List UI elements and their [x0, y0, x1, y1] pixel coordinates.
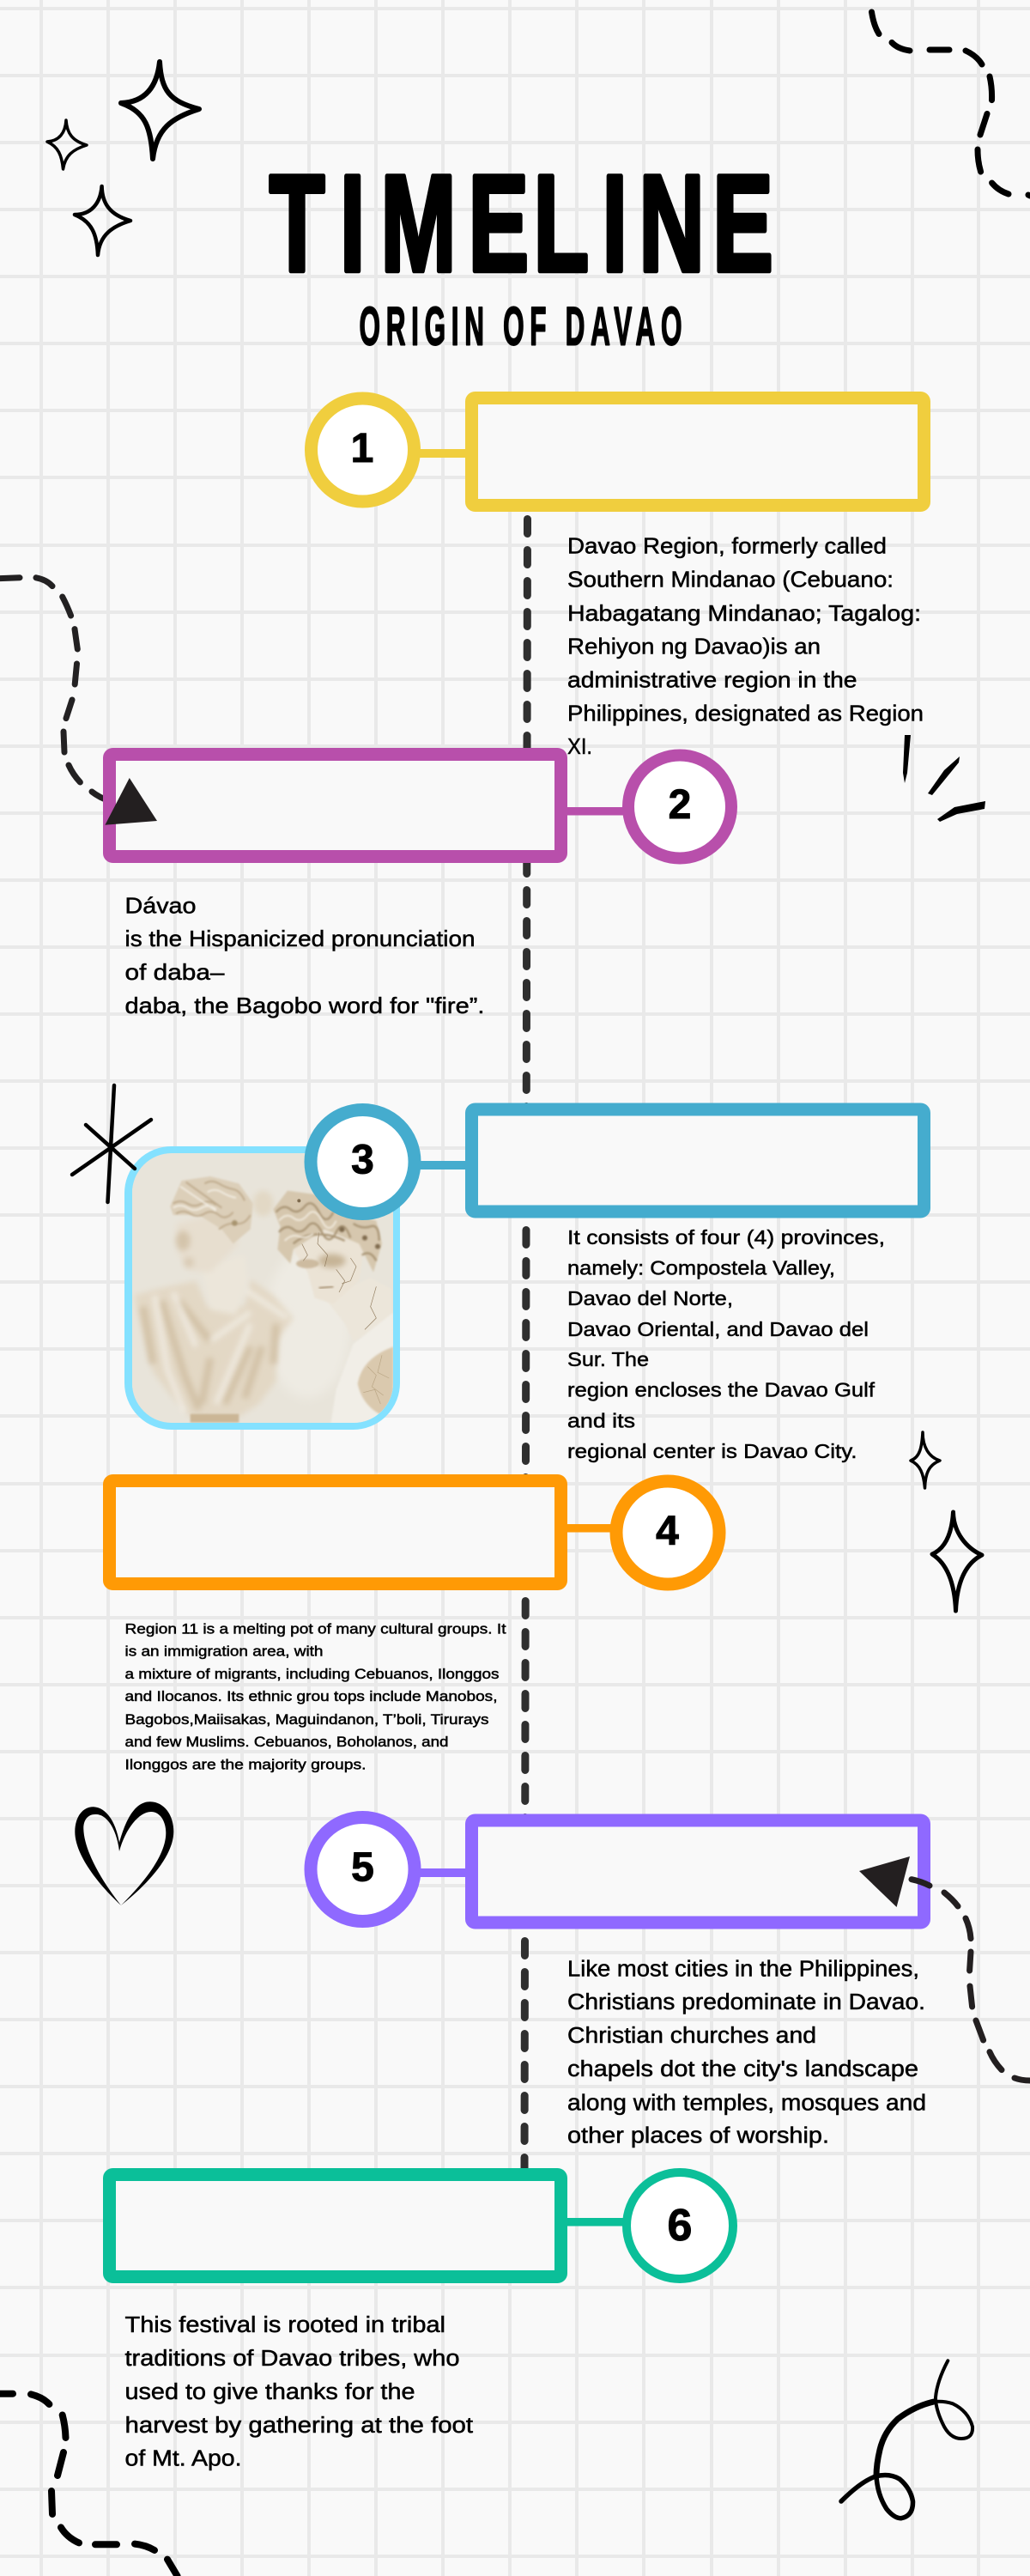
number badge 4 — [616, 1481, 719, 1584]
number badge 1 — [311, 398, 414, 501]
timeline dashed spine — [524, 519, 527, 2168]
right bust body — [333, 1299, 343, 1319]
text block 5 — [567, 1958, 926, 2148]
icon: right sparkle small — [911, 1432, 940, 1488]
text block 6 — [125, 2313, 473, 2471]
text block 3: Sur. The — [567, 1348, 649, 1370]
text block 3: It consists of four (4) provinces, — [567, 1226, 885, 1249]
text block 4: is an immigration area, with — [125, 1643, 323, 1659]
text block 5: other places of worship. — [567, 2124, 829, 2148]
connector 5 — [419, 1868, 467, 1877]
text block 5: Like most cities in the Philippines, — [567, 1958, 919, 1982]
number badge 4: 4 — [656, 1509, 679, 1554]
decoration: bottom left dashed curve — [0, 2394, 178, 2576]
text block 1 — [567, 533, 924, 726]
panel: step 1 — [311, 398, 924, 726]
left bust body — [135, 1279, 294, 1417]
number badge 3 — [311, 1109, 415, 1214]
connector 2 — [566, 807, 624, 816]
icon: heart doodle — [75, 1801, 173, 1905]
text block 2: of daba– — [125, 959, 225, 985]
text block 2: Dávao — [125, 892, 196, 918]
panel: step 3 — [311, 1109, 924, 1462]
decoration: left dashed curve — [0, 578, 110, 801]
title box 6 — [110, 2174, 561, 2277]
number badge 5 — [311, 1817, 415, 1922]
text block 4 — [125, 1620, 506, 1772]
title box 3 — [472, 1109, 924, 1212]
text block 1: Philippines, designated as Region — [567, 701, 924, 726]
text block 6: harvest by gathering at the foot — [125, 2414, 473, 2438]
icon: arrowhead pointing at box 2 — [105, 778, 157, 825]
icon: arrowhead pointing at box 5 — [859, 1856, 910, 1907]
text block 5: chapels dot the city's landscape — [567, 2057, 918, 2081]
number badge 5: 5 — [351, 1844, 374, 1891]
text block 1: administrative region in the — [567, 666, 857, 692]
text block 3: namely: Compostela Valley, — [567, 1257, 835, 1279]
text block 4: Bagobos,Maiisakas, Maguindanon, T’boli, Tirurays — [125, 1711, 489, 1728]
text block 3: region encloses the Davao Gulf — [567, 1379, 876, 1401]
connector 4 — [566, 1524, 612, 1532]
connector 1 — [419, 449, 467, 458]
text block 3: and its — [567, 1410, 635, 1432]
photo: classical statues — [124, 1146, 401, 1430]
text block 5: Christian churches and — [567, 2024, 816, 2048]
text block 2: daba, the Bagobo word for "fire”. — [125, 993, 484, 1018]
title box 4 — [110, 1480, 561, 1583]
text block 4: and few Muslims. Cebuanos, Boholanos, and — [125, 1734, 448, 1750]
panel: step 4 — [110, 1480, 719, 1772]
text block 4: a mixture of migrants, including Cebuanos, Ilonggos — [125, 1666, 500, 1682]
number badge 3: 3 — [351, 1137, 374, 1183]
text block 6: traditions of Davao tribes, who — [125, 2347, 460, 2371]
title box 1 — [472, 398, 924, 505]
panel: step 5 — [311, 1817, 926, 2148]
text block 2: is the Hispanicized pronunciation — [125, 926, 476, 951]
number badge 1: 1 — [351, 426, 373, 471]
title: TIMELINE — [270, 146, 773, 301]
title box 2 — [110, 754, 561, 857]
icon: curly squiggle — [841, 2360, 972, 2518]
decoration: top right dashed curve — [872, 12, 1030, 196]
title box 5 — [472, 1820, 924, 1923]
text block 5: Christians predominate in Davao. — [567, 1990, 925, 2014]
icon: large sparkle — [121, 62, 199, 159]
icon: right sparkle large — [932, 1512, 982, 1611]
icon: small sparkle — [47, 120, 87, 169]
text block 4: Region 11 is a melting pot of many cultural groups. It — [125, 1620, 506, 1637]
text block 6: This festival is rooted in tribal — [125, 2313, 445, 2337]
text: last line of block 1: XI. — [567, 733, 592, 759]
text block 1: Rehiyon ng Davao)is an — [567, 634, 821, 659]
text block 4: and Ilocanos. Its ethnic grou tops include Manobos, — [125, 1688, 498, 1704]
text block 4: Ilonggos are the majority groups. — [125, 1757, 366, 1772]
number badge 6 — [627, 2172, 733, 2279]
text block 3: Davao del Norte, — [567, 1287, 733, 1309]
decoration: right dashed curve — [912, 1880, 1030, 2081]
text block 6: used to give thanks for the — [125, 2380, 415, 2404]
panel: step 2 — [110, 754, 731, 1018]
text block 3: Davao Oriental, and Davao del — [567, 1318, 869, 1340]
icon: three accent ticks — [903, 735, 985, 822]
text block 1: Habagatang Mindanao; Tagalog: — [567, 600, 921, 626]
subtitle: ORIGIN OF DAVAO — [359, 295, 682, 356]
text block 6: of Mt. Apo. — [125, 2447, 242, 2471]
text block 3: regional center is Davao City. — [567, 1440, 857, 1462]
icon: asterisk doodle — [72, 1085, 151, 1202]
number badge 2: 2 — [669, 782, 691, 828]
number badge 6: 6 — [668, 2201, 692, 2251]
text block 3 — [567, 1226, 885, 1462]
connector 3 — [419, 1161, 467, 1170]
panel: step 6 — [110, 2172, 733, 2471]
text block 1: Davao Region, formerly called — [567, 533, 887, 559]
number badge 2 — [628, 756, 731, 859]
text block 5: along with temples, mosques and — [567, 2091, 926, 2115]
icon: medium sparkle — [75, 186, 130, 255]
text block 2 — [125, 892, 484, 1018]
connector 6 — [566, 2218, 624, 2226]
text block 1: Southern Mindanao (Cebuano: — [567, 567, 894, 592]
